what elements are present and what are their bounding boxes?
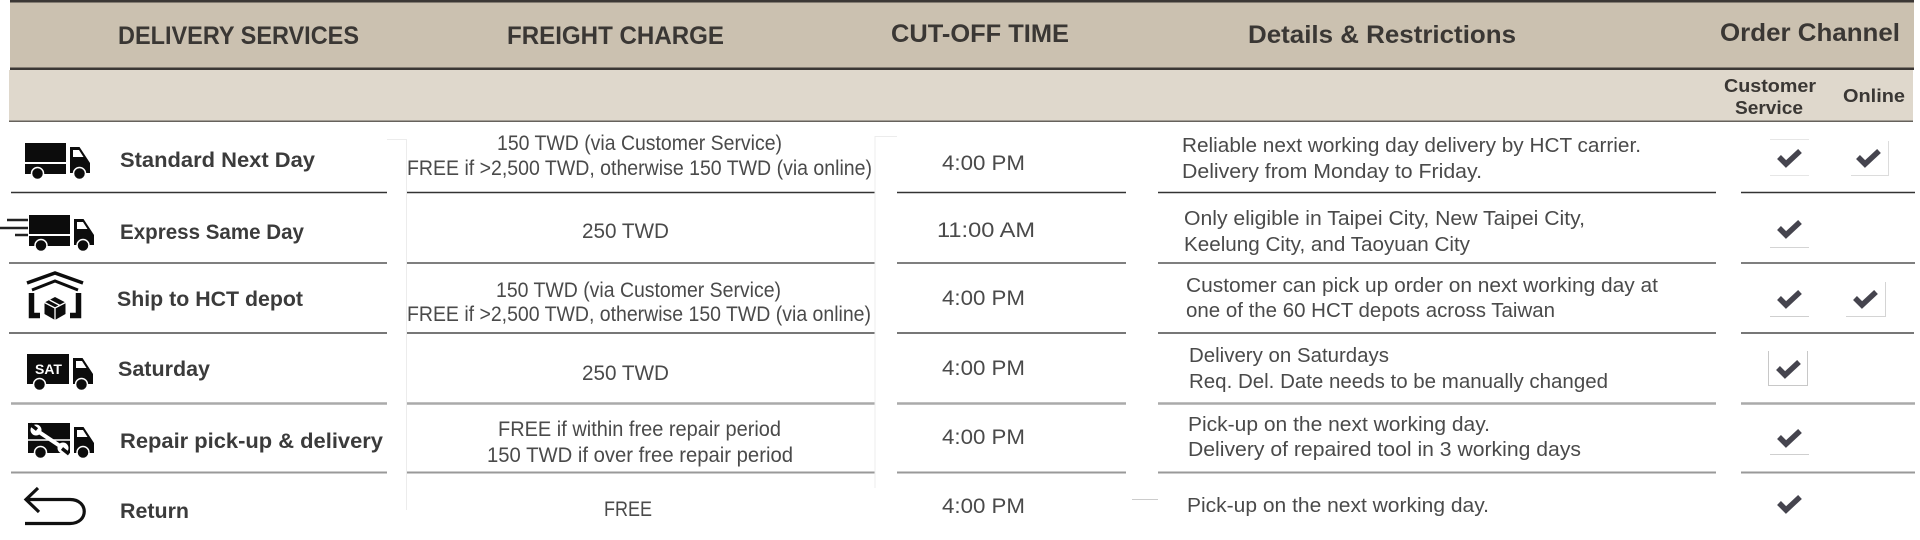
subheading: customer service: Service (1735, 98, 1803, 118)
label: Ship to HCT depot (117, 288, 303, 311)
row: express same day (0, 208, 1809, 256)
label: Standard Next Day (120, 149, 315, 172)
details: Delivery on Saturdays (1189, 345, 1389, 367)
details: Delivery from Monday to Friday. (1182, 161, 1482, 183)
check: customer service (1770, 222, 1809, 248)
icon: saturday truck: SAT (35, 361, 62, 377)
details: one of the 60 HCT depots across Taiwan (1186, 300, 1555, 322)
heading: details and restrictions: Details & Restrictions (1248, 21, 1516, 49)
icon: truck (25, 143, 90, 180)
details: Req. Del. Date needs to be manually changed (1189, 371, 1608, 393)
freight charge: FREE if >2,500 TWD, otherwise 150 TWD (via online) (407, 303, 871, 326)
cut-off time: 4:00 PM (942, 287, 1025, 310)
check: customer service (1770, 292, 1809, 316)
cut-off time: 4:00 PM (942, 152, 1025, 175)
details: Pick-up on the next working day. (1187, 495, 1489, 517)
check: online (1846, 282, 1886, 316)
header band (9, 0, 1914, 122)
freight charge: 150 TWD (via Customer Service) (496, 279, 781, 302)
freight charge: FREE if >2,500 TWD, otherwise 150 TWD (via online) (407, 157, 872, 180)
label: Express Same Day (120, 221, 304, 244)
details: Reliable next working day delivery by HCT carrier. (1182, 135, 1641, 157)
subheading: online: Online (1843, 86, 1905, 106)
heading: order channel: Order Channel (1720, 19, 1900, 47)
label: Saturday (118, 358, 210, 381)
details: Customer can pick up order on next working day at (1186, 275, 1658, 297)
check: online (1851, 141, 1888, 176)
row: return (25, 488, 1800, 524)
row: standard next day (25, 132, 1888, 183)
freight charge: 250 TWD (582, 220, 669, 243)
freight charge: 150 TWD if over free repair period (487, 444, 793, 467)
freight charge: 250 TWD (582, 362, 669, 385)
icon: fast truck (0, 215, 94, 252)
cut-off time: 11:00 AM (937, 219, 1035, 242)
cut-off time: 4:00 PM (942, 426, 1025, 449)
heading: cut-off time: CUT-OFF TIME (891, 20, 1069, 48)
check: customer service (1779, 497, 1800, 510)
icon: saturday truck (27, 354, 93, 390)
icon: repair truck with wrench (28, 423, 94, 458)
icon: depot with parcel (27, 273, 83, 320)
row: repair pick-up and delivery (28, 414, 1809, 467)
cut-off time: 4:00 PM (942, 357, 1025, 380)
row: saturday (27, 345, 1808, 393)
subheading: customer service: Customer (1724, 76, 1816, 96)
freight charge: 150 TWD (via Customer Service) (497, 132, 782, 155)
heading: freight charge: FREIGHT CHARGE (507, 22, 724, 50)
check: customer service (1770, 140, 1809, 176)
details: Only eligible in Taipei City, New Taipei City, (1184, 208, 1585, 230)
details: Keelung City, and Taoyuan City (1184, 234, 1470, 256)
cut-off time: 4:00 PM (942, 495, 1025, 518)
details: Pick-up on the next working day. (1188, 414, 1490, 436)
details: Delivery of repaired tool in 3 working days (1188, 439, 1581, 461)
row: ship to depot (27, 273, 1886, 326)
freight charge: FREE (604, 498, 652, 521)
row dividers and faint cell borders (9, 136, 1915, 510)
freight charge: FREE if within free repair period (498, 418, 781, 441)
icon: return arrow (25, 488, 84, 524)
heading: delivery services: DELIVERY SERVICES (118, 22, 359, 50)
label: Return (120, 500, 189, 523)
check: customer service (1768, 351, 1808, 386)
check: customer service (1770, 431, 1809, 454)
label: Repair pick-up & delivery (120, 430, 383, 453)
